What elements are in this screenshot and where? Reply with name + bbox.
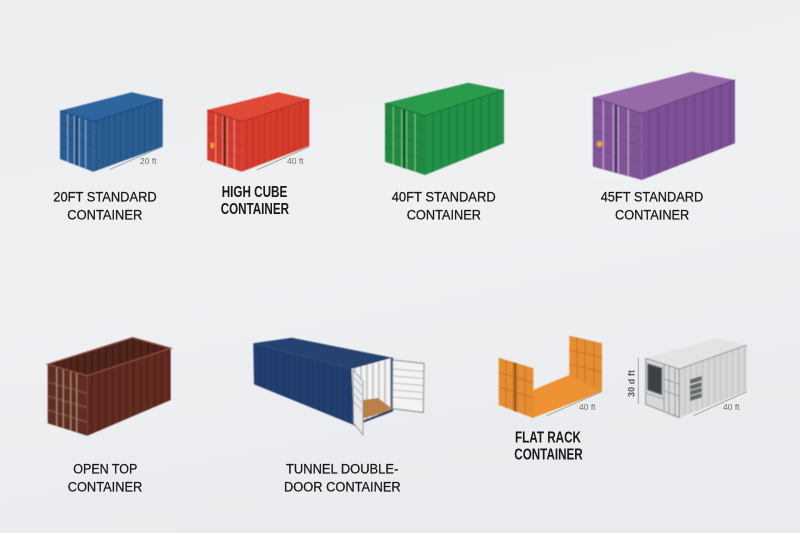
left open door <box>353 370 363 435</box>
label: 20ft standard container: CONTAINER <box>67 208 143 222</box>
label: 45ft standard container: CONTAINER <box>615 208 690 222</box>
container: 20ft standard (blue) <box>60 92 163 172</box>
label: 45ft standard container <box>601 190 704 222</box>
label: 40ft standard container <box>392 190 496 222</box>
label: open top container <box>68 462 143 494</box>
label: flat rack container: CONTAINER <box>514 447 583 464</box>
label: tunnel double-door container: DOOR CONTAINER <box>284 480 401 494</box>
dimension: flat rack 40 ft: 40 ft <box>579 402 596 412</box>
label: 20ft standard container <box>53 190 157 222</box>
dimension: reefer 40 ft <box>693 392 747 416</box>
dimension: reefer height: 30 d ft <box>626 370 636 397</box>
label: flat rack container <box>514 430 583 464</box>
container: 45ft standard (purple) <box>588 72 735 180</box>
container: flat rack (orange) <box>499 336 602 418</box>
label: high cube container <box>221 184 289 218</box>
label: open top container: OPEN TOP <box>73 462 137 476</box>
dimension: 20 ft: 20 ft <box>140 156 157 166</box>
label: tunnel double-door container: TUNNEL DOUBLE- <box>286 462 398 476</box>
dimension: reefer height <box>626 358 638 404</box>
label: 20ft standard container: 20FT STANDARD <box>53 190 157 204</box>
container: open top (brown) <box>48 338 171 436</box>
refrigeration unit panel <box>648 364 662 395</box>
container: high cube (red) <box>207 92 309 172</box>
container: tunnel double-door (navy) <box>253 338 424 435</box>
label: 45ft standard container: 45FT STANDARD <box>601 190 704 204</box>
container: 40ft standard (green) <box>385 83 504 175</box>
label: high cube container: HIGH CUBE <box>222 184 287 201</box>
container interior <box>352 358 392 425</box>
container: reefer (white) <box>646 338 747 418</box>
label: flat rack container: FLAT RACK <box>515 430 582 446</box>
dimension: 40 ft <box>257 147 309 170</box>
right open door <box>392 360 424 412</box>
label: tunnel double-door container <box>284 462 401 494</box>
dimension: 20 ft <box>110 147 163 169</box>
dimension: 40 ft: 40 ft <box>287 156 304 166</box>
label: open top container: CONTAINER <box>68 480 143 494</box>
label: 40ft standard container: CONTAINER <box>407 208 481 222</box>
label: high cube container: CONTAINER <box>221 201 289 218</box>
dimension: flat rack 40 ft <box>547 392 602 416</box>
dimension: reefer 40 ft: 40 ft <box>723 402 740 412</box>
label: 40ft standard container: 40FT STANDARD <box>392 190 496 204</box>
side vent <box>690 376 702 401</box>
